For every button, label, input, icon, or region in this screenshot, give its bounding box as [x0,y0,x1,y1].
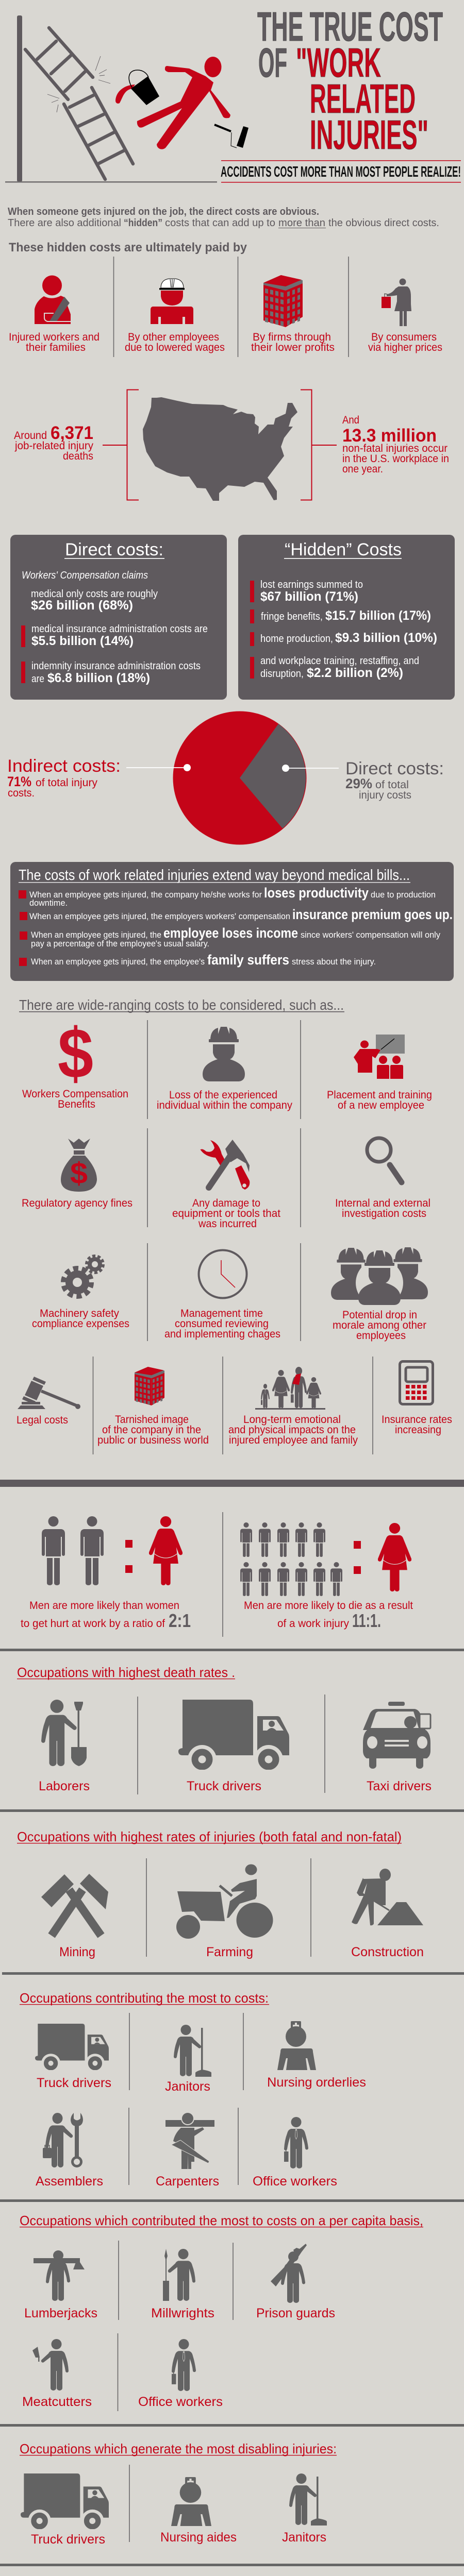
item: family suffers: When an employee gets injured, the employee's [31,957,205,967]
item: indemnity insurance admin [21,660,201,685]
caption: Tarnished image [115,1414,189,1426]
heading: hidden costs paid by: These hidden costs are ultimately paid by [9,241,247,255]
heading: contributing most to costs: Occupations contributing the most to costs: [20,1990,269,2006]
caption: Assemblers [36,2174,103,2189]
caption [172,1197,280,1230]
panel: millwrights [151,2249,214,2320]
text block: introduction: When someone gets injured on the job, the direct costs are obvious. [8,206,319,217]
panel: nursing orderlies [267,2021,366,2090]
icon: trainer and students [354,1035,405,1079]
icon: dollar sign: $ [58,1014,93,1093]
item: fringe benefits: $15.7 billion (17%) [325,608,431,623]
panel: consumers [368,278,442,353]
item: indemnity insurance admin: $6.8 billion (18%) [47,671,150,685]
item: medical insurance admin [21,623,208,648]
icon: janitor [289,2473,327,2526]
caption: of a work injury [277,1618,349,1630]
label: direct costs: injury costs [359,789,411,801]
caption: By other employees [128,331,219,343]
stat: non-fatal injuries: And [342,414,359,426]
item: home production: $9.3 billion (10%) [335,631,437,645]
panel: costs beyond medical bills [10,862,454,981]
label: direct costs [345,759,444,801]
text block: introduction: the obvious direct costs. [328,217,439,229]
item: indemnity insurance admin: indemnity insurance administration costs [31,660,201,672]
item: fringe benefits [250,608,431,623]
icon: worker with hard hat [151,279,193,324]
caption: Construction [351,1945,424,1959]
caption: Janitors [282,2530,326,2545]
heading: highest rates of injuries: Occupations with highest rates of injuries (both fatal and non-fatal) [17,1829,402,1844]
icon: laborer with shovel [41,1700,87,1766]
caption: Prison guards [256,2306,335,2320]
item: workplace training: $2.2 billion (2%) [307,666,403,680]
caption: investigation costs [342,1208,426,1219]
heading: per capita costs: Occupations which contributed the most to costs on a per capita basis, [20,2213,423,2228]
panel: drop in morale [331,1247,428,1342]
caption: Janitors [165,2079,210,2094]
caption: Regulatory agency fines [22,1197,132,1209]
title: "WORK [296,40,381,86]
item: lost earnings: lost earnings summed to [260,579,363,590]
caption [335,1197,430,1219]
panel: legal costs [16,1377,80,1426]
item: lost earnings: $67 billion (71%) [260,589,358,604]
icon: nurse [171,2477,211,2526]
panel: prison guards [256,2244,335,2320]
caption: injured employee and family [229,1434,358,1446]
item: loses productivity: due to production [371,890,436,900]
icon: crossed hammers [41,1874,108,1936]
icon: paint roller [214,125,248,148]
caption: Any damage to [192,1197,260,1209]
caption [9,331,100,353]
icon: guard with rifle [271,2244,307,2303]
caption: By firms through [253,331,331,343]
item: home production [250,631,437,646]
panel: janitors [282,2473,327,2545]
caption: Taxi drivers [367,1779,432,1793]
heading: Direct costs: [65,540,163,560]
icon: nurse [277,2021,316,2070]
icon: taxi [363,1702,430,1769]
icon: millwright with screwdriver [163,2249,195,2301]
stat: deaths: job-related injury [14,440,93,452]
caption: Men are more likely than women [29,1600,179,1612]
panel: carpenters [156,2112,219,2189]
panel: investigation costs [335,1138,430,1219]
caption: equipment or tools that [172,1208,280,1219]
icon: broken ladder [25,28,133,179]
caption: Insurance rates [382,1414,452,1426]
caption: public or business world [97,1434,209,1446]
icon: family [255,1367,325,1410]
caption [97,1414,209,1446]
caption: Truck drivers [31,2532,105,2547]
stat: non-fatal injuries [342,414,449,475]
icon: wrench and hammer [200,1140,250,1190]
caption [382,1414,452,1436]
item: family suffers: family suffers [207,952,289,968]
icon: office worker [284,2117,308,2168]
icon: money bag: $ [70,1157,88,1190]
icon: eleven men, one woman [240,1522,411,1596]
panel: placement and training [327,1035,432,1111]
caption: By consumers [371,331,437,343]
caption: Lumberjacks [24,2306,97,2320]
illustration: worker falling from broken ladder [5,15,248,182]
label: indirect costs: Indirect costs: [7,756,121,776]
caption: via higher prices [368,342,442,353]
icon: lumberjack with axe [34,2250,85,2301]
item: loses productivity [19,885,436,908]
panel: assemblers [36,2113,103,2189]
icon: woman with shopping bag [382,278,411,326]
caption: Farming [206,1945,253,1959]
panel: mining [41,1874,108,1959]
item: loses income: pay a percentage of the employee's usual salary. [31,939,209,948]
caption: their families [26,342,86,353]
panel: nursing aides [160,2477,237,2545]
heading: highest death rates: Occupations with highest death rates . [17,1665,235,1680]
panel: US injury statistics [14,389,449,501]
caption: Truck drivers [187,1779,261,1793]
item: family suffers: stress about the injury. [292,957,376,967]
text block: introduction: more than [278,217,325,229]
item: workplace training: and workplace training, restaffing, and [260,655,419,667]
panel: management time [164,1250,280,1340]
map: United States [103,389,337,501]
caption: Nursing orderlies [267,2075,366,2090]
caption [333,1309,426,1342]
panel: taxi drivers [363,1702,432,1793]
label: direct costs: of total [375,779,409,791]
heading: The costs of work related injuries extend way beyond medical bills... [19,867,410,884]
icon: truck [178,1700,289,1774]
icon: office building [263,275,303,327]
caption [368,331,442,353]
caption [327,1089,432,1111]
caption: Truck drivers [37,2076,111,2090]
icon: janitor [174,2025,211,2077]
text: claims: Workers' Compensation claims [22,570,148,581]
caption: Mining [59,1945,95,1959]
item: loses income: since workers' compensation will only [301,930,440,940]
item: insurance premium: When an employee gets injured, the employers workers' compensation [29,911,290,921]
item: loses income [20,925,440,948]
caption: consumed reviewing [175,1318,269,1330]
caption [251,331,335,353]
text block: introduction: costs that can add up to [165,217,275,229]
caption: was incurred [198,1218,257,1230]
text block: introduction: “hidden” [124,217,162,229]
caption: Benefits [58,1098,95,1110]
icon: assembler [43,2113,83,2167]
caption [228,1414,358,1446]
icon: falling man [137,57,230,149]
item: medical only: medical only costs are roughly [31,588,158,600]
panel: men vs women death ratio [240,1522,413,1631]
item: lost earnings [250,579,363,604]
label: direct costs: Direct costs: [345,759,444,778]
panel: injured workers and families [9,275,100,353]
item: medical insurance admin: medical insurance administration costs are [31,623,208,635]
panel: office workers [253,2117,337,2189]
stat: deaths: deaths [63,450,93,462]
caption [22,1088,128,1110]
item: insurance premium [20,907,453,922]
item: workplace training [250,655,419,680]
stat: non-fatal injuries: non-fatal injuries occur [342,443,448,454]
panel: damage to equipment [172,1140,280,1230]
icon: paint bucket [115,70,159,105]
caption: 11:1. [352,1610,381,1631]
item: workplace training: disruption, [260,668,304,680]
stat: deaths [14,423,93,462]
item: loses productivity: downtime. [29,898,68,908]
caption: individual within the company [157,1099,292,1111]
caption [32,1308,129,1330]
caption: Internal and external [335,1197,430,1209]
caption: Laborers [39,1779,90,1793]
icon: tractor [176,1864,273,1939]
panel: janitors [165,2025,211,2094]
icon: gavel [18,1377,80,1409]
panel: farming [176,1864,273,1959]
icon: truck [21,2473,109,2532]
caption: Machinery safety [40,1308,119,1319]
label: indirect costs: 71% [7,774,31,789]
caption [164,1308,280,1340]
caption: Men are more likely to die as a result [244,1600,413,1612]
panel: regulatory fines [22,1139,132,1209]
caption [125,331,225,353]
icon: injured worker with sling [35,275,71,324]
title [257,4,443,158]
stat: non-fatal injuries: in the U.S. workplace in [342,453,449,465]
label: indirect costs: of total injury [36,777,97,789]
caption: of a new employee [338,1099,424,1111]
panel: meatcutters [22,2339,92,2409]
caption: morale among other [333,1319,426,1331]
item: loses productivity: When an employee gets injured, the company he/she works for [29,890,262,900]
caption: employees [356,1330,406,1342]
item: loses productivity: loses productivity [264,885,369,901]
item: fringe benefits: fringe benefits, [261,611,323,622]
stat: non-fatal injuries: 13.3 million [342,426,437,446]
label: indirect costs [7,756,121,799]
icon: worker shoveling [352,1869,423,1925]
panel: laborers [39,1700,90,1793]
panel: other employees [125,279,225,353]
panel: lumberjacks [24,2250,97,2320]
heading: wide-ranging costs: There are wide-ranging costs to be considered, such as... [19,997,344,1013]
icon: meatcutter [32,2339,69,2391]
caption: Placement and training [327,1089,432,1101]
caption: Long-term emotional [243,1414,341,1426]
item: loses income: employee loses income [163,925,298,941]
panel: tarnished image [97,1367,209,1446]
label: indirect costs: costs. [8,787,35,799]
panel: insurance rates [382,1361,452,1436]
item: medical only [31,588,158,613]
caption: and implementing chages [164,1328,280,1340]
panel: firms [251,275,335,353]
item: medical only: $26 billion (68%) [31,598,133,613]
caption: Potential drop in [342,1309,417,1321]
caption: due to lowered wages [125,342,225,353]
panel: hidden costs [238,535,455,700]
icon: worker with helmet [203,1027,245,1081]
caption: compliance expenses [32,1318,129,1330]
caption [157,1089,292,1111]
icon: two men, one woman [42,1516,183,1585]
caption: to get hurt at work by a ratio of [21,1618,165,1630]
icon: clock [199,1250,246,1298]
stat: non-fatal injuries: one year. [342,463,383,475]
label: direct costs: 29% [345,776,372,791]
caption: Office workers [253,2174,337,2189]
panel: workers compensation benefits [22,1014,128,1110]
caption: Meatcutters [22,2395,92,2409]
icon: gears [63,1256,103,1296]
stat: deaths: 6,371 [51,423,93,443]
caption: Management time [180,1308,263,1319]
caption: 2:1 [169,1610,191,1631]
icon: magnifying glass [367,1138,402,1182]
caption: Nursing aides [160,2530,237,2545]
pie chart: indirect vs direct costs [7,711,444,845]
caption: Carpenters [156,2174,219,2189]
caption: their lower profits [251,342,335,353]
icon: office building [135,1367,164,1405]
caption: Loss of the experienced [169,1089,277,1101]
caption: Office workers [138,2395,223,2409]
caption: Millwrights [151,2306,214,2320]
panel: truck drivers [35,2024,111,2090]
panel: men vs women injury ratio [21,1516,191,1631]
caption: Injured workers and [9,331,100,343]
caption: increasing [395,1424,441,1436]
panel: long-term impacts [228,1367,358,1446]
panel: direct costs [10,535,227,700]
icon: calculator [400,1361,433,1404]
panel: construction [351,1869,424,1959]
panel: truck drivers [21,2473,109,2547]
heading: “Hidden” Costs [285,540,402,560]
panel: truck drivers [178,1700,289,1793]
caption [21,1600,191,1631]
icon: office worker [172,2339,196,2391]
caption: of the company in the [102,1424,201,1436]
title: OF [258,40,287,86]
caption [244,1600,413,1631]
heading: disabling injuries: Occupations which generate the most disabling injuries: [20,2441,337,2456]
stat: deaths: Around [14,430,47,442]
icon: money bag [61,1139,97,1192]
panel: office workers [138,2339,223,2409]
text block: introduction: There are also additional [8,217,121,229]
item: home production: home production, [260,633,333,645]
item: family suffers [19,952,376,968]
text block: introduction [8,206,439,229]
panel: machinery safety [32,1256,129,1330]
item: medical insurance admin: $5.5 billion (14%) [31,634,134,648]
item: indemnity insurance admin: are [31,673,44,685]
icon: carpenter [165,2112,214,2169]
icon: three workers [331,1247,428,1307]
caption: and physical impacts on the [228,1424,356,1436]
caption: Workers Compensation [22,1088,128,1100]
item: loses income: When an employee gets injured, the [31,930,161,940]
caption: Legal costs [16,1414,68,1426]
panel: loss of experienced individual [157,1027,292,1111]
icon: truck [35,2024,109,2073]
